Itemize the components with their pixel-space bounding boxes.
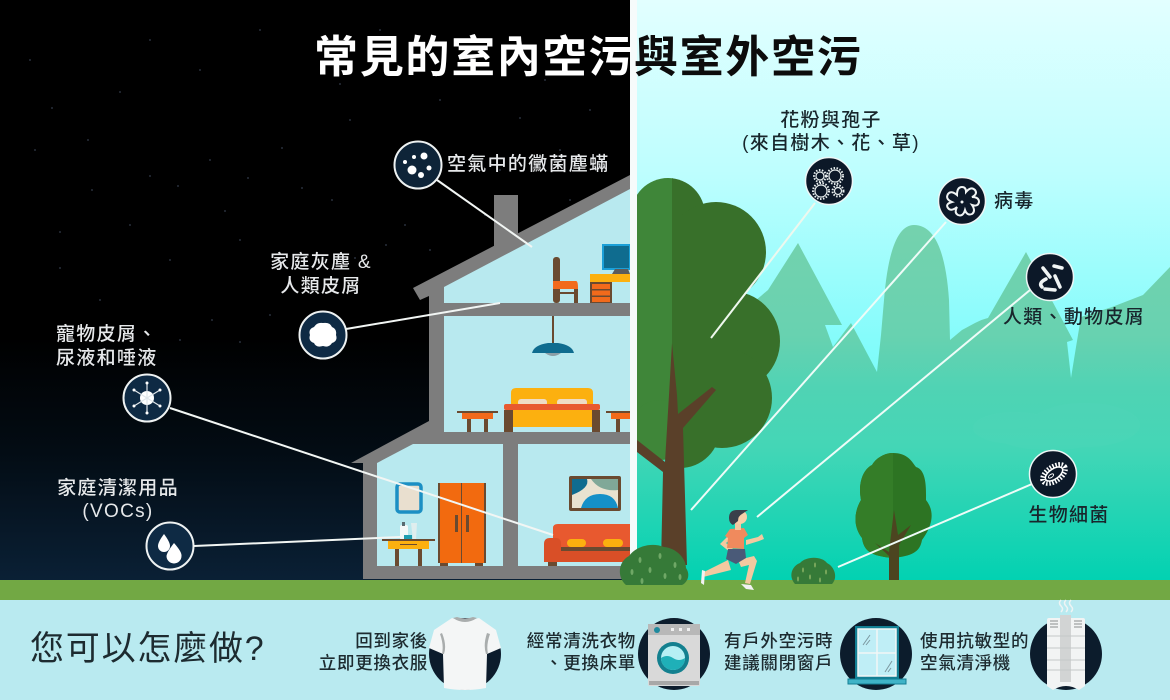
label: cleaning products xyxy=(57,477,179,522)
lower left room interior xyxy=(377,444,503,566)
tip: close windows xyxy=(724,618,912,690)
label: pollen and spores xyxy=(742,109,920,154)
label: household dust xyxy=(270,251,372,297)
label: human and animal dander: 人類、動物皮屑 xyxy=(1003,306,1145,328)
divider xyxy=(630,0,637,580)
tip: air purifier xyxy=(920,600,1102,690)
small tree xyxy=(855,453,932,580)
house xyxy=(351,175,630,579)
tip: air purifier: 使用抗敏型的 xyxy=(920,631,1029,651)
tip: close windows: 建議關閉窗戶 xyxy=(724,653,833,673)
label: virus: 病毒 xyxy=(994,190,1035,212)
label: household dust: 家庭灰塵 & xyxy=(270,251,372,273)
icon: dust xyxy=(300,312,346,358)
leader line: virus xyxy=(691,222,946,510)
tip: close windows: 有戶外空污時 xyxy=(724,631,833,651)
ground xyxy=(0,580,1170,600)
label: mold and mites: 空氣中的黴菌塵蟎 xyxy=(447,153,609,175)
desk and monitor xyxy=(590,245,630,303)
bush large xyxy=(620,545,688,585)
leader line: dander outdoor xyxy=(757,290,1030,517)
bedside table left xyxy=(457,411,498,432)
sofa xyxy=(544,524,630,566)
ceiling lamp xyxy=(532,316,574,356)
bedside table right xyxy=(606,411,630,432)
label: bacteria: 生物細菌 xyxy=(1028,504,1110,526)
icon: droplets xyxy=(146,522,194,570)
label: cleaning products: (VOCs) xyxy=(82,501,154,522)
heading: what you can do: 您可以怎麼做? xyxy=(30,630,266,668)
house walls and roof xyxy=(351,175,630,579)
icon: pet dander xyxy=(124,374,170,422)
label: pet dander: 尿液和唾液 xyxy=(56,347,158,369)
runner xyxy=(701,510,764,590)
icon: bacteria xyxy=(1030,450,1076,498)
label: pet dander: 寵物皮屑、 xyxy=(56,323,158,345)
chimney xyxy=(494,195,518,255)
icon: mold and mites xyxy=(394,142,442,188)
mountains xyxy=(637,225,1170,580)
icon: virus xyxy=(938,178,986,224)
mirror xyxy=(397,484,421,512)
middle floor interior xyxy=(444,316,630,432)
large tree xyxy=(630,178,780,565)
icon: dander outdoor xyxy=(1026,254,1074,300)
leader line: pet dander xyxy=(170,408,553,535)
tip: change clothes xyxy=(319,617,501,690)
leader line: pollen xyxy=(711,203,815,338)
faint clouds xyxy=(973,403,1140,450)
upper floor interior xyxy=(444,189,630,303)
label: pollen and spores: 花粉與孢子 xyxy=(780,109,882,131)
leader line: bacteria xyxy=(838,484,1032,567)
painting xyxy=(569,476,621,511)
leader line: cleaning products xyxy=(194,537,400,546)
label: pollen and spores: (來自樹木、花、草) xyxy=(742,132,920,154)
chair xyxy=(553,257,578,303)
leader line: mold and mites xyxy=(437,180,532,247)
bed xyxy=(504,388,600,432)
tip: wash bedding xyxy=(527,618,710,690)
tip: wash bedding: 經常清洗衣物 xyxy=(527,631,636,651)
wardrobe xyxy=(438,483,486,566)
tip: wash bedding: 、更換床單 xyxy=(545,653,636,673)
panel: what you can do xyxy=(0,600,1170,700)
label: household dust: 人類皮屑 xyxy=(280,275,362,297)
tip: air purifier: 空氣清淨機 xyxy=(920,653,1011,673)
tip: change clothes: 立即更換衣服 xyxy=(319,653,428,673)
leader line: dust xyxy=(346,303,500,329)
panel: outdoor sky xyxy=(631,0,1170,580)
title: 常見的室內空污與室外空污 xyxy=(314,33,862,82)
lower right room interior xyxy=(518,444,630,566)
tip: change clothes: 回到家後 xyxy=(355,631,428,651)
label: pet dander xyxy=(56,323,158,369)
title: 常見的室內空污與室外空污 xyxy=(314,33,862,82)
bush small xyxy=(791,558,835,584)
panel: indoor night sky xyxy=(0,0,631,580)
cleaning table with bottles xyxy=(382,522,435,566)
label: cleaning products: 家庭清潔用品 xyxy=(57,477,179,499)
icon: pollen xyxy=(806,158,852,204)
